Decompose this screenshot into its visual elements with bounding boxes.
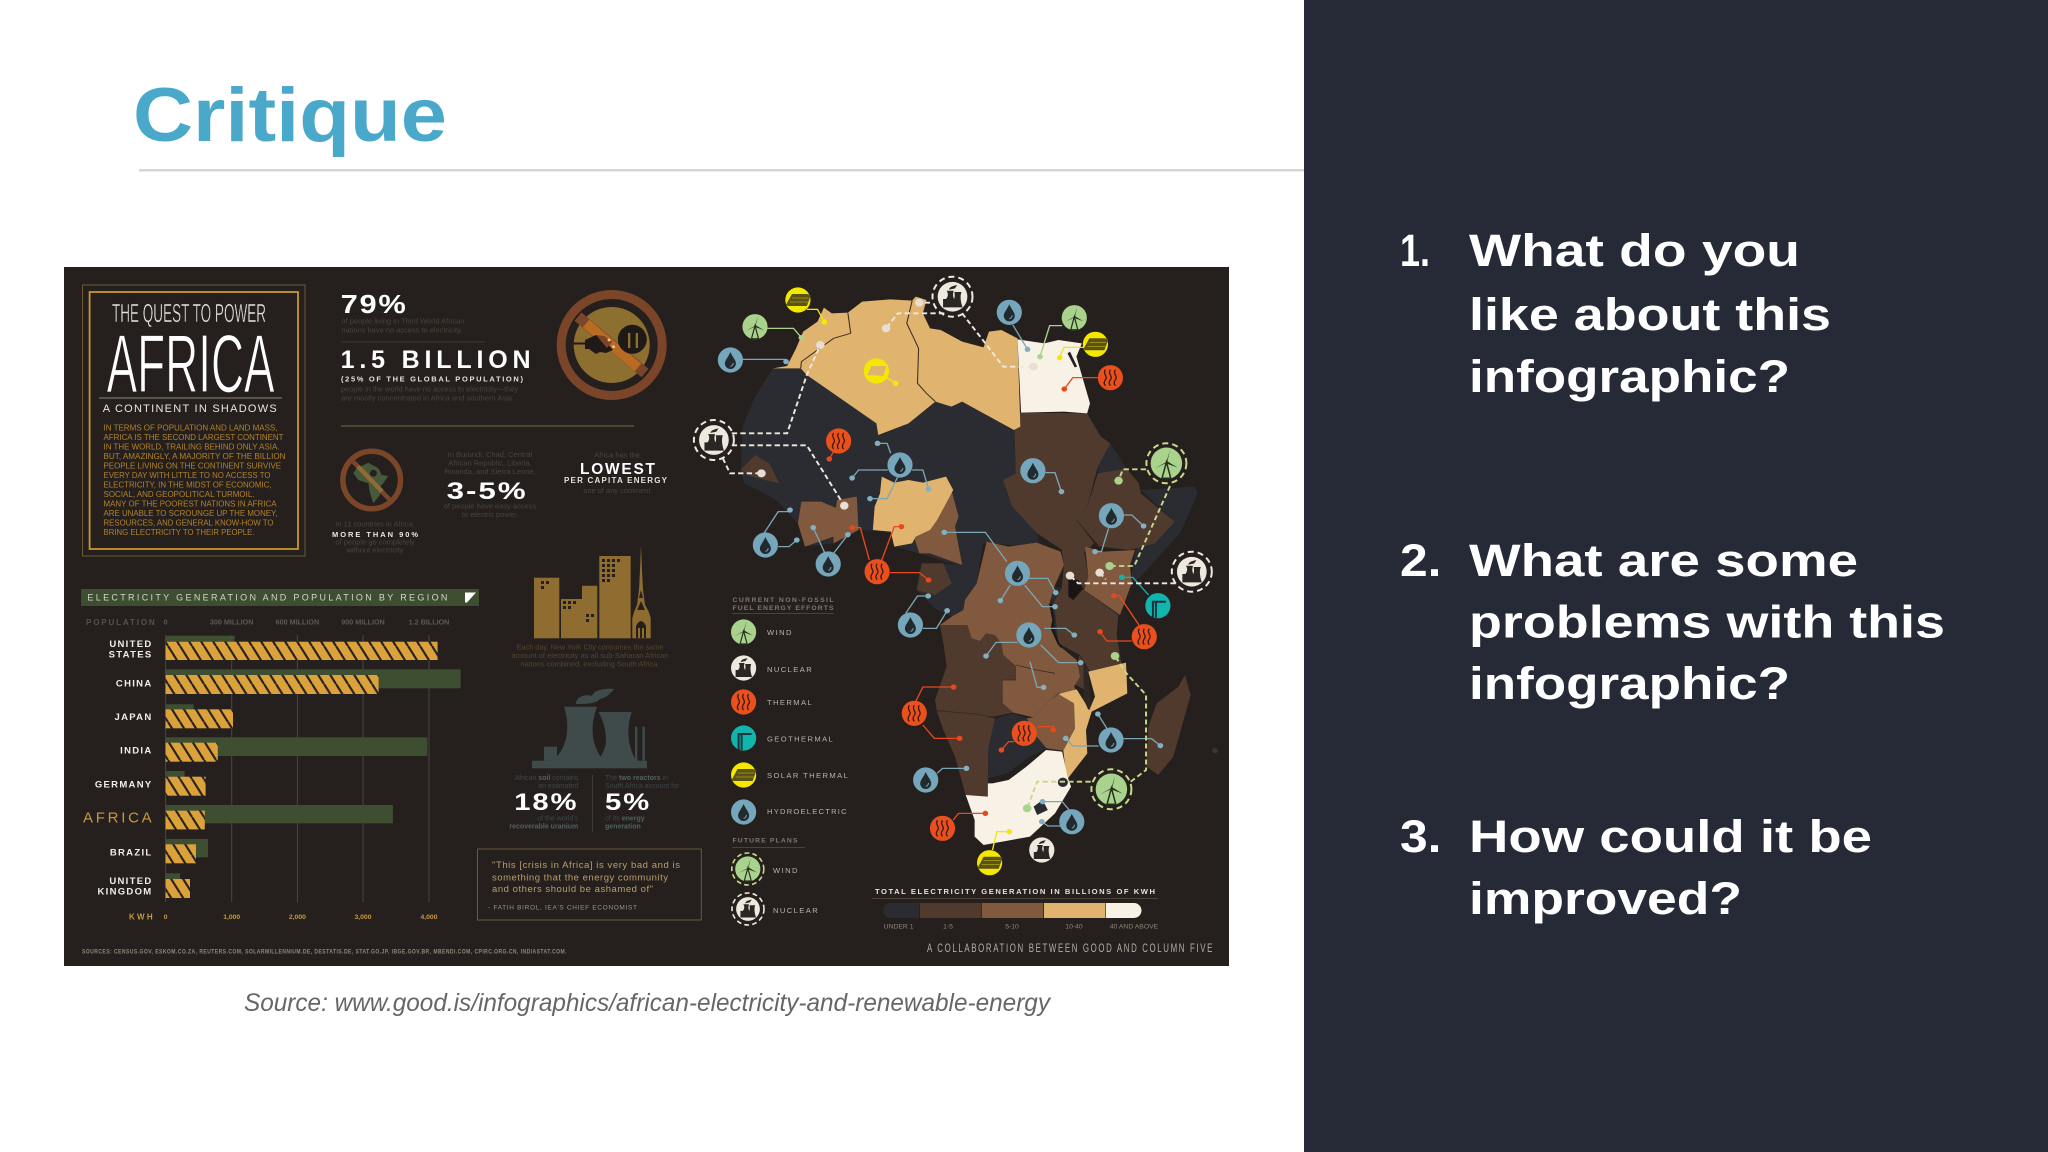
stat: 3-5%: In Burundi, Chad, Central: [448, 450, 533, 459]
legend: total electricity generation: 5-10: [1005, 924, 1019, 930]
legend: total electricity generation: 10-40: [1065, 924, 1083, 930]
row: Japan: JAPAN: [114, 712, 152, 723]
question 3: [1400, 811, 1872, 924]
stat: 79%: 79%: [341, 289, 408, 319]
stat: 5% reactors: 5%: [605, 789, 651, 816]
icon: future wind, Ethiopia: [1146, 443, 1186, 483]
icon: nuclear, South Africa: [1029, 837, 1054, 863]
row: Japan: [114, 704, 233, 728]
icon: crossed-out Africa: [343, 451, 401, 509]
row: United States: STATES: [109, 650, 152, 660]
icon: hydro, Egypt: [997, 300, 1022, 325]
stat: 18% uranium: 18%: [514, 789, 578, 816]
icon: thermal, Angola: [902, 701, 927, 726]
row: Germany: [95, 771, 206, 796]
stat: lowest per capita energy: LOWEST: [580, 461, 656, 478]
connectors: future wind: [1023, 469, 1170, 812]
bar chart: electricity and population by region: 4,000: [420, 914, 438, 921]
panel: infographic: [64, 267, 1229, 966]
title box: AFRICA IS THE SECOND LARGEST CONTINENT: [104, 432, 284, 442]
region: 40+ billion kWh: [966, 339, 1090, 845]
stat: 5% reactors: [605, 775, 680, 830]
stat: 3-5%: to electric power.: [462, 510, 518, 519]
title box: BUT, AMAZINGLY, A MAJORITY OF THE BILLION: [104, 451, 286, 461]
question 3: How could it be: [1469, 811, 1872, 862]
title box: IN THE WORLD, TRAILING BEHIND ONLY ASIA.: [104, 442, 280, 452]
legend item: wind: WIND: [767, 628, 793, 637]
map: central and southern countries: [917, 542, 1191, 797]
stat: 18% uranium: recoverable uranium: [509, 824, 578, 830]
chart header: ELECTRICITY GENERATION AND POPULATION BY REGION: [87, 592, 447, 602]
bar chart: electricity and population by region: POPULATION: [86, 618, 155, 627]
text: New York comparison: [512, 642, 668, 668]
heading: Critique: Critique: [133, 73, 447, 158]
icon: wind, Morocco: [742, 314, 768, 339]
heading rule: [139, 169, 1305, 172]
stat: 3-5%: 3-5%: [447, 478, 528, 505]
icon: future nuclear, Kenya: [1172, 552, 1212, 592]
title box: [82, 285, 305, 556]
bar chart: electricity and population by region: 1.2 BILLION: [409, 618, 449, 626]
legend: total electricity generation: UNDER 1: [884, 924, 914, 930]
stat: 18% uranium: [509, 775, 579, 830]
question 2: [1400, 535, 1945, 709]
row: United States: UNITED: [109, 639, 152, 650]
stat: 79%: of people living in Third World African: [341, 316, 464, 326]
quote box: "This [crisis in Africa] is very bad and is: [492, 860, 680, 871]
title box: MANY OF THE POOREST NATIONS IN AFRICA: [104, 498, 277, 508]
stat: 1.5 billion: people in the world have no access to electricity—they: [341, 384, 518, 394]
row: Brazil: BRAZIL: [110, 847, 152, 858]
title box: ARE UNABLE TO SCROUNGE UP THE MONEY,: [104, 508, 278, 518]
text: New York comparison: amount of electricity as all sub-Saharan African: [512, 651, 668, 660]
icon: thermal, Tanzania: [1132, 624, 1157, 649]
stat: 79%: nations have no access to electricity.: [341, 326, 462, 334]
icon: future wind, South Africa: [1091, 769, 1131, 809]
bar chart: electricity and population by region: 600 MILLION: [276, 618, 319, 626]
stat: 1.5 billion: are mostly concentrated in Africa and southern Asia.: [341, 394, 514, 402]
icon: solar ring, Algeria: [864, 358, 889, 384]
stat: 79%: [341, 289, 464, 334]
credit line: A COLLABORATION BETWEEN GOOD AND COLUMN FIVE: [927, 943, 1214, 955]
icon: hydro, Western Sahara: [718, 347, 743, 373]
title box: EVERY DAY WITH LITTLE TO NO ACCESS TO: [104, 470, 271, 480]
stat: 3-5%: African Republic, Liberia,: [448, 458, 532, 468]
row: China: CHINA: [116, 678, 152, 689]
icon: thermal, Egypt: [1098, 365, 1123, 390]
question 1: infographic?: [1469, 351, 1790, 402]
connectors: geothermal: [1119, 575, 1149, 595]
icon: future nuclear, Tunisia: [932, 277, 972, 317]
icon: crossed-out plug: [561, 294, 662, 396]
stat: lowest per capita energy: PER CAPITA ENERGY: [564, 476, 668, 485]
icon: solar, Egypt: [1083, 332, 1108, 357]
legend: total electricity generation: TOTAL ELECTRICITY GENERATION IN BILLIONS OF KWH: [875, 887, 1155, 896]
source caption: Source: www.good.is/infographics/african-electricity-and-renewable-energy: [244, 989, 1051, 1017]
icon: hydro, DR Congo: [1005, 561, 1030, 586]
map: northern and western countries: [741, 297, 1198, 587]
stat: more than 90%: without electricity: [345, 546, 404, 554]
title box: AFRICA: [107, 317, 275, 410]
icon: solar, Morocco: [785, 287, 811, 313]
question 2: What are some: [1469, 535, 1858, 586]
icon: hydro, Zambia: [1016, 622, 1042, 648]
question 2: infographic?: [1469, 658, 1790, 709]
bar chart: electricity and population by region: [83, 618, 461, 922]
question 2: problems with this: [1469, 596, 1945, 648]
title box: A CONTINENT IN SHADOWS: [103, 403, 277, 415]
icon: thermal, South Africa: [930, 816, 955, 841]
question 1: like about this: [1469, 289, 1831, 340]
legend item: geothermal: GEOTHERMAL: [767, 734, 834, 744]
legend item: solar thermal: SOLAR THERMAL: [767, 771, 849, 780]
title box: ELECTRICITY, IN THE MIDST OF ECONOMIC,: [104, 480, 272, 490]
connectors: solar: [807, 309, 1084, 850]
row: United States: [109, 636, 438, 660]
row: United Kingdom: [97, 873, 190, 898]
legend item: hydroelectric: [731, 799, 848, 825]
title box: PEOPLE LIVING ON THE CONTINENT SURVIVE: [104, 460, 281, 470]
region: 10-40 billion kWh, Mozambique: [1058, 663, 1127, 780]
connectors: thermal: [826, 378, 1139, 820]
legend item: thermal: [731, 689, 813, 715]
icon: hydro, Guinea: [753, 532, 778, 558]
icon: hydro, Sudan: [1020, 458, 1046, 483]
legend: current non-fossil fuel efforts: CURRENT NON-FOSSIL: [732, 597, 834, 604]
legend item: nuclear: NUCLEAR: [767, 665, 813, 674]
bar chart: electricity and population by region: 900 MILLION: [341, 618, 385, 626]
icon: hydro, Niger: [887, 452, 913, 478]
icon: hydro, Ivory Coast: [816, 551, 841, 577]
legend item: thermal: THERMAL: [767, 698, 813, 707]
row: Germany: GERMANY: [95, 780, 152, 790]
panel: questions: [1304, 0, 2048, 1152]
row: India: [120, 737, 427, 762]
stat: more than 90%: MORE THAN 90%: [332, 530, 418, 539]
stat: more than 90%: of people go completely: [335, 538, 415, 546]
icon: thermal, Mali: [826, 428, 851, 454]
text: New York comparison: nations combined, excluding South Africa.: [520, 660, 660, 668]
icon: wind, Egypt: [1062, 305, 1087, 330]
legend item: solar thermal: [731, 762, 849, 788]
row: Africa: AFRICA: [83, 810, 152, 826]
row: Africa: [83, 805, 393, 829]
stat: 18% uranium: an estimated: [538, 783, 578, 790]
icon: New York skyline: [534, 545, 651, 638]
stat: 3-5%: of people have easy access: [444, 502, 537, 510]
row: Brazil: [110, 839, 208, 863]
title box: THE QUEST TO POWER: [112, 298, 266, 328]
question 3: 3.: [1400, 811, 1442, 862]
legend item: wind: [731, 619, 793, 645]
stat: 1.5 billion: [341, 346, 531, 402]
legend: current non-fossil fuel efforts: FUEL ENERGY EFFORTS: [732, 605, 834, 612]
region: under 1 billion kWh, centre and south: [917, 542, 1062, 778]
stat: more than 90%: In 11 countries in Africa,: [335, 520, 415, 528]
icon: hydro, Ethiopia: [1099, 503, 1124, 528]
connectors: hydroelectric: [742, 325, 1163, 826]
row: United Kingdom: KINGDOM: [97, 886, 152, 897]
icon: solar, South Africa: [977, 850, 1003, 875]
bar chart: electricity and population by region: 1,000: [223, 914, 240, 921]
legend item: future wind: WIND: [773, 866, 799, 875]
legend: total electricity generation: 40 AND ABOVE: [1110, 924, 1159, 930]
legend item: hydroelectric: HYDROELECTRIC: [767, 807, 848, 816]
icon: nuclear plant: [532, 689, 647, 768]
question 1: What do you: [1469, 225, 1800, 276]
question 2: 2.: [1400, 535, 1442, 586]
legend item: future nuclear: NUCLEAR: [773, 906, 819, 915]
quote box: [478, 849, 701, 920]
map of Africa: [723, 297, 1218, 850]
icon: hydro, Congo: [898, 612, 923, 638]
stat: 3-5%: Rwanda, and Sierra Leone,: [444, 467, 536, 476]
quote box: and others should be ashamed of": [492, 884, 653, 895]
stat: 18% uranium: African soil contains: [514, 775, 579, 782]
bar chart: electricity and population by region: 300 MILLION: [210, 618, 253, 626]
title box: SOCIAL, AND GEOPOLITICAL TURMOIL.: [104, 489, 254, 499]
bar chart: electricity and population by region: 0: [164, 618, 168, 626]
connectors: wind: [767, 326, 1062, 359]
stat: 5% reactors: The two reactors in: [605, 775, 668, 782]
stat: 1.5 billion: (25% OF THE GLOBAL POPULATION): [341, 374, 524, 384]
question 1: 1.: [1400, 225, 1430, 276]
stat: 3-5%: [444, 450, 537, 519]
bar chart: electricity and population by region: 2,000: [289, 914, 306, 921]
region: 1-5 billion kWh, centre and south: [917, 547, 1191, 797]
icon: thermal, Gulf of Guinea: [864, 559, 890, 584]
stat: 5% reactors: South Africa account for: [605, 783, 680, 790]
icon: thermal, Botswana: [1012, 721, 1037, 746]
bar chart: electricity and population by region: 3,000: [354, 914, 372, 921]
title box: IN TERMS OF POPULATION AND LAND MASS,: [104, 422, 278, 432]
stat: 1.5 billion: 1.5 BILLION: [341, 346, 531, 374]
legend: future plans: FUTURE PLANS: [732, 838, 798, 844]
stat: more than 90%: [332, 520, 418, 554]
stat: 5% reactors: generation: [605, 824, 641, 830]
row: United Kingdom: UNITED: [109, 876, 152, 887]
stat: 5% reactors: of its energy: [605, 816, 645, 822]
legend item: geothermal: [731, 725, 834, 751]
region: 5-10 billion kWh, centre and south: [940, 542, 1135, 751]
connectors: future nuclear: [723, 299, 1176, 583]
icon: future nuclear, Senegal: [694, 420, 734, 460]
row: China: [116, 669, 461, 694]
question 3: improved?: [1469, 873, 1742, 924]
text: New York comparison: Each day, New York City consumes the same: [517, 642, 663, 652]
icon: geothermal, Kenya: [1145, 593, 1170, 618]
icon: hydro, Mozambique: [1098, 727, 1124, 753]
title box: RESOURCES, AND GENERAL KNOW-HOW TO: [104, 518, 274, 528]
legend item: nuclear: [731, 655, 813, 681]
map: Egypt and South Africa, with connectors: [723, 299, 1218, 850]
icon: hydro, Namibia: [913, 767, 938, 793]
legend: total electricity generation: [872, 887, 1159, 930]
chart header: [81, 589, 479, 606]
bar chart: electricity and population by region: 0: [164, 914, 168, 921]
stat: 18% uranium: of the world's: [537, 816, 579, 822]
stat: lowest per capita energy: Africa has the: [594, 450, 640, 460]
quote box: something that the energy community: [492, 872, 668, 883]
quote box: - FATIH BIROL, IEA'S CHIEF ECONOMIST: [488, 904, 637, 912]
legend: future plans: [732, 838, 819, 925]
stat: lowest per capita energy: [564, 450, 668, 495]
bar chart: electricity and population by region: KWH: [129, 912, 153, 922]
legend: current non-fossil fuel efforts: [731, 597, 849, 825]
legend: total electricity generation: 1-5: [943, 924, 953, 930]
map icons: [694, 277, 1212, 875]
row: India: INDIA: [120, 746, 152, 756]
icon: hydro, South Africa: [1059, 809, 1084, 834]
sources line: SOURCES: CENSUS.GOV, ESKOM.CO.ZA, REUTERS.COM, SOLARMILLENNIUM.DE, DESTATIS.DE, STAT.GO.JP, IBGE.GOV.BR, MBENDI.COM, CPIRC.ORG.CN, INDIASTAT.COM.: [82, 948, 567, 956]
stat: lowest per capita energy: use of any continent: [583, 486, 651, 495]
question 1: [1400, 225, 1831, 402]
title box: BRING ELECTRICITY TO THEIR PEOPLE.: [104, 527, 254, 537]
